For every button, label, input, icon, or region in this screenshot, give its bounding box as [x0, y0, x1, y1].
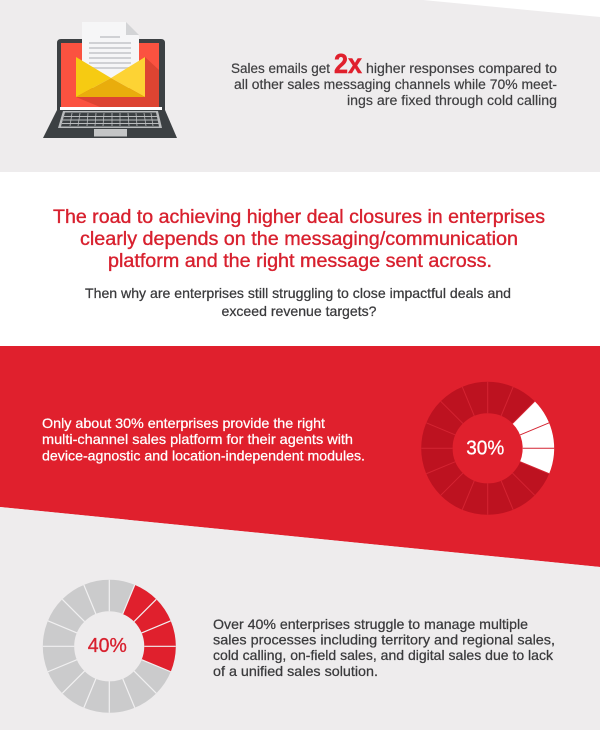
- text block: 40% statement: [213, 616, 555, 679]
- heading: road to higher deal closures: platform and the right message sent across.: [108, 251, 492, 272]
- text block: question: Then why are enterprises still struggling to close impactful deals and: [85, 285, 511, 301]
- chart: 30% donut: [421, 382, 554, 515]
- text block: 30% statement: [42, 415, 365, 464]
- label: 30%: 30%: [466, 437, 504, 459]
- heading: road to higher deal closures: The road to achieving higher deal closures in enterprises: [53, 207, 545, 228]
- text block: question: exceed revenue targets?: [222, 303, 377, 319]
- icon: laptop with email: [43, 22, 177, 138]
- text block: 40% statement: sales processes including territory and regional sales,: [213, 632, 555, 648]
- text block: 40% statement: of a unified sales solution.: [213, 663, 378, 679]
- text block: 30% statement: device-agnostic and location-independent modules.: [42, 448, 365, 464]
- highlight: 2x: 2x: [334, 48, 362, 79]
- chart: 40% donut: [43, 580, 176, 713]
- text block: sales emails statistic: all other sales messaging channels while 70% meet-: [234, 77, 557, 92]
- text block: sales emails statistic: [231, 48, 557, 108]
- label: 40%: 40%: [88, 635, 127, 657]
- heading: road to higher deal closures: [53, 207, 545, 272]
- text block: sales emails statistic: ings are fixed through cold calling: [347, 93, 557, 108]
- panel: red band: [0, 346, 600, 567]
- text block: sales emails statistic: Sales emails get: [231, 61, 330, 76]
- heading: road to higher deal closures: clearly depends on the messaging/communication: [80, 229, 518, 250]
- text block: 40% statement: cold calling, on-field sales, and digital sales due to lack: [213, 647, 554, 663]
- text block: 40% statement: Over 40% enterprises struggle to manage multiple: [213, 616, 528, 632]
- text block: 30% statement: Only about 30% enterprises provide the right: [42, 415, 325, 431]
- text block: sales emails statistic: higher responses compared to: [366, 61, 557, 76]
- text block: question: [85, 285, 511, 319]
- text block: 30% statement: multi-channel sales platform for their agents with: [42, 431, 353, 447]
- panel: bottom grey band: [0, 507, 600, 730]
- panel: top grey band: [0, 0, 600, 172]
